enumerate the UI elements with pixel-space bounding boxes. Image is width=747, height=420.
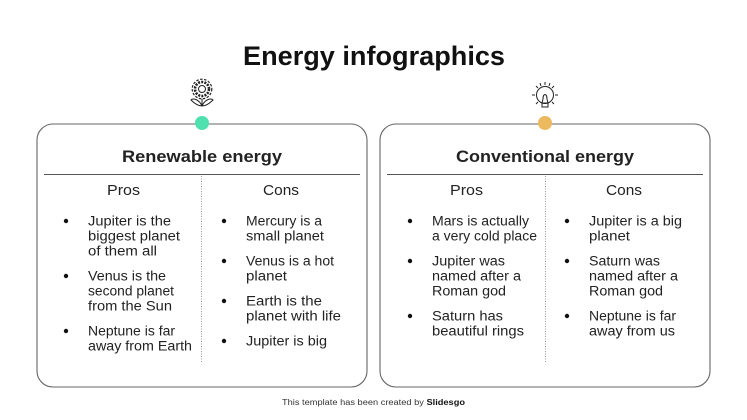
heading: renewable energy: Renewable energy — [122, 147, 283, 166]
list: conventional pros — [408, 214, 537, 338]
list: conventional pros: beautiful rings — [432, 324, 524, 338]
list: renewable cons: Earth is the — [246, 294, 322, 308]
list: renewable pros: Venus is the — [88, 268, 166, 284]
list: renewable pros: Neptune is far — [88, 324, 176, 338]
column heading: pros: Pros — [107, 182, 140, 199]
list: renewable pros: second planet — [88, 284, 174, 298]
icon: light bulb — [532, 82, 558, 107]
heading: conventional energy: Conventional energy — [456, 147, 635, 166]
title: Energy infographics — [243, 41, 505, 71]
list: conventional pros: Mars is actually — [432, 214, 529, 228]
list: conventional pros: a very cold place — [432, 228, 537, 244]
list: conventional cons: planet — [589, 228, 630, 244]
list: renewable pros: from the Sun — [88, 298, 172, 314]
panel: conventional energy — [380, 116, 710, 387]
list: renewable pros: biggest planet — [88, 228, 180, 244]
list: renewable cons: Mercury is a — [246, 214, 323, 228]
list: conventional cons: Saturn was — [589, 254, 660, 268]
list: renewable cons — [222, 214, 341, 348]
column heading: pros: Pros — [450, 182, 483, 199]
list: conventional cons: Jupiter is a big — [589, 214, 682, 228]
footer credit: This template has been created by Slidesgo — [282, 398, 465, 407]
list: conventional cons — [565, 214, 682, 338]
marker: orange dot — [538, 116, 552, 130]
icon: sunflower — [191, 79, 213, 106]
list: conventional cons: named after a — [589, 268, 679, 284]
list: conventional cons: Neptune is far — [589, 308, 677, 324]
list: conventional cons: away from us — [589, 324, 675, 338]
list: conventional pros: Jupiter was — [432, 254, 505, 268]
column heading: cons: Cons — [263, 182, 299, 199]
list: renewable cons: Venus is a hot — [246, 254, 334, 268]
list: renewable pros: of them all — [88, 244, 157, 258]
list: renewable cons: small planet — [246, 228, 324, 244]
list: renewable cons: planet — [246, 268, 287, 284]
list: renewable pros — [64, 214, 192, 354]
panel: renewable energy — [37, 116, 367, 387]
list: renewable cons: planet with life — [246, 308, 341, 324]
list: renewable pros: Jupiter is the — [88, 214, 171, 228]
column heading: cons: Cons — [606, 182, 642, 199]
marker: green dot — [195, 116, 209, 130]
list: renewable cons: Jupiter is big — [246, 334, 327, 348]
list: conventional cons: Roman god — [589, 284, 663, 298]
list: conventional pros: Saturn has — [432, 308, 503, 324]
list: conventional pros: Roman god — [432, 284, 506, 298]
list: conventional pros: named after a — [432, 268, 522, 284]
list: renewable pros: away from Earth — [88, 338, 192, 354]
